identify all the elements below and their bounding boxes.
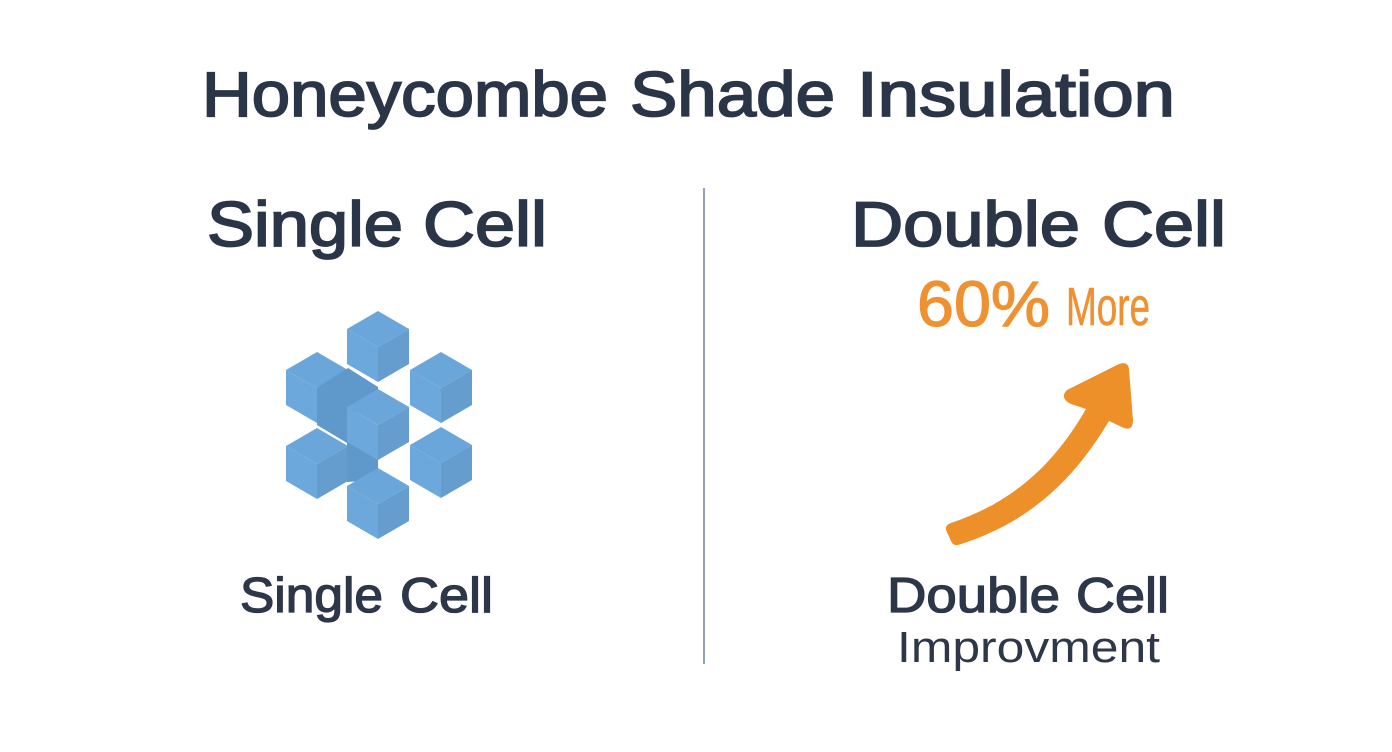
title: Honeycombe <box>202 60 608 130</box>
heading: double cell: Cell <box>1102 190 1226 260</box>
heading: single cell: Single <box>207 190 403 260</box>
stat: 60% more: More <box>1066 277 1150 337</box>
stat: 60% more: 60% <box>917 268 1050 340</box>
heading: single cell <box>207 190 547 260</box>
heading: double cell <box>851 190 1226 260</box>
icon: honeycomb cubes <box>286 311 472 539</box>
label: double cell: Cell <box>1076 569 1169 623</box>
icon: upward arrow <box>946 363 1133 545</box>
divider <box>703 188 705 664</box>
heading: single cell: Cell <box>423 190 547 260</box>
title: Insulation <box>857 60 1175 130</box>
title: Shade <box>630 60 835 130</box>
label: single cell: Cell <box>400 569 493 623</box>
label: double cell: Double <box>887 569 1060 623</box>
stat: 60% more <box>917 268 1150 340</box>
label: double cell <box>887 569 1169 623</box>
title <box>202 60 1175 130</box>
label: improvement: Improvment <box>897 623 1160 672</box>
heading: double cell: Double <box>851 190 1080 260</box>
label: single cell: Single <box>240 569 383 623</box>
label: single cell <box>240 569 493 623</box>
